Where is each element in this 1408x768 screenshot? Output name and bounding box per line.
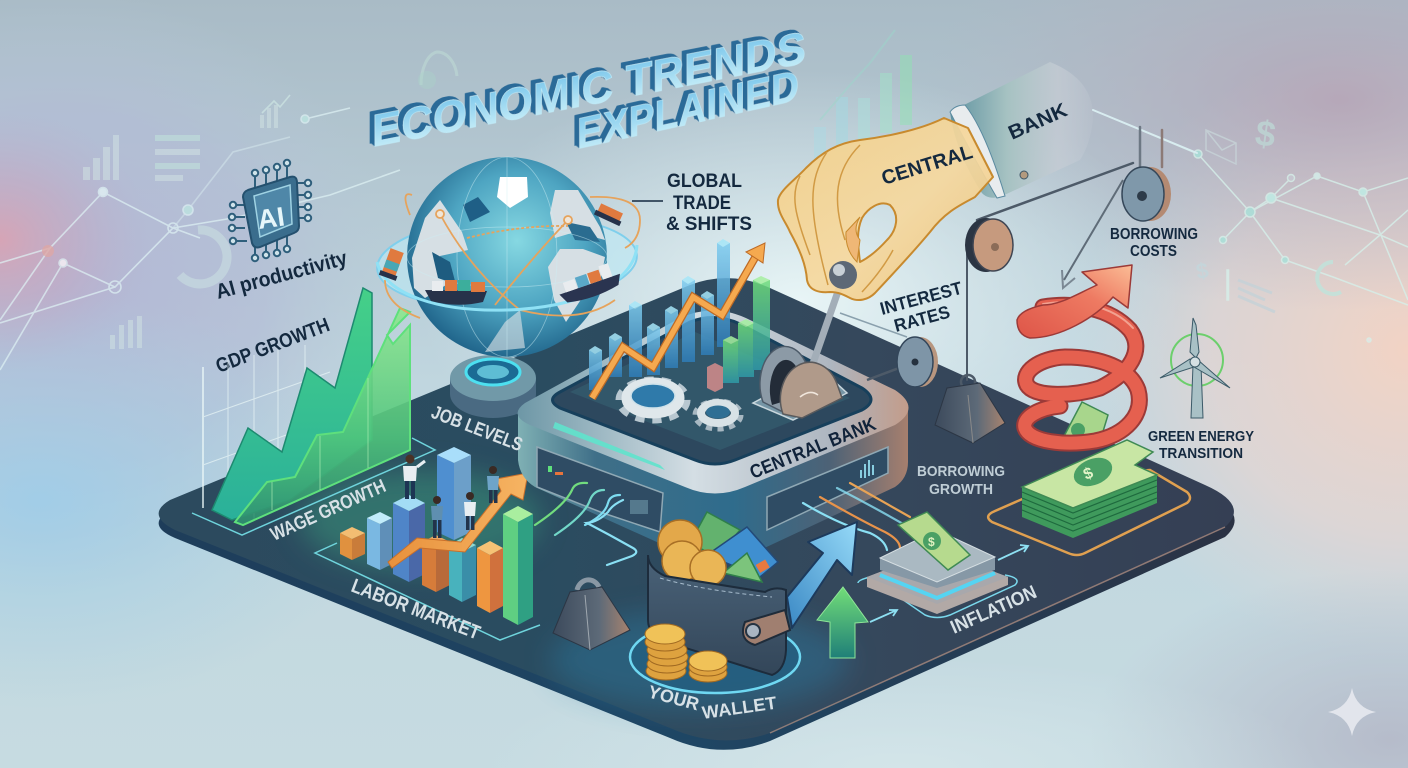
back area series (212, 288, 372, 520)
blue rising arrow (787, 522, 857, 628)
globe sphere (407, 157, 607, 357)
coin stack (645, 624, 688, 680)
platform (159, 278, 1235, 750)
labor market frame (315, 543, 540, 640)
continents (412, 177, 605, 352)
spiral arrow shaft and head (1017, 265, 1132, 338)
cargo ship left (379, 247, 406, 281)
chart grid (203, 345, 330, 520)
lever base plate (753, 368, 847, 420)
orbit ring front (377, 245, 637, 310)
wallet contents (658, 512, 778, 586)
faint network and chart icons, right (1093, 110, 1408, 342)
dollar icon, faint: $ (1253, 112, 1278, 155)
inflation base ring (858, 575, 1017, 618)
label: your wallet: WALLET (701, 693, 778, 723)
central bank console (518, 239, 908, 564)
label: your wallet (646, 682, 778, 723)
console cables (535, 483, 910, 565)
wallet glow ring (630, 621, 800, 693)
label text: TRADE (673, 193, 731, 214)
wallet strap (743, 610, 790, 645)
faint bar chart behind hand (814, 30, 912, 160)
leader line (632, 200, 663, 202)
label: your wallet: YOUR (646, 682, 701, 714)
console top rim (518, 310, 908, 494)
money stack frame (988, 470, 1190, 555)
label: green energy transition (1148, 429, 1254, 462)
console trend arrow (592, 243, 765, 398)
globe on pedestal (375, 157, 640, 418)
worker figures (403, 454, 499, 538)
console label: CENTRAL BANK (747, 414, 879, 484)
banknote (898, 512, 970, 570)
left console panel (537, 447, 663, 532)
large gear (620, 381, 686, 419)
label: GDP growth: GDP GROWTH (213, 314, 333, 378)
label: borrowing costs (1110, 226, 1198, 260)
copper pulley (965, 218, 1013, 272)
console bar chart (589, 239, 770, 392)
sleeve button (1020, 171, 1028, 179)
label: green energy transition: GREEN ENERGY (1148, 429, 1254, 445)
rope with arrow to spiral (1062, 180, 1123, 288)
wallet body (648, 555, 786, 675)
lever rod (810, 277, 843, 372)
sleeve label: BANK (1005, 99, 1071, 145)
label: green energy transition: TRANSITION (1159, 446, 1243, 462)
small pulley (897, 337, 938, 387)
money stack (1022, 440, 1157, 538)
rope from small pulley to console (867, 362, 915, 380)
wind turbine icon (1160, 318, 1230, 418)
hand sleeve (950, 62, 1093, 198)
glowing status strip (553, 422, 665, 470)
upper pulley (1122, 167, 1171, 221)
money stack: $ (1081, 465, 1096, 484)
lever ball (829, 261, 857, 289)
lever housing (760, 346, 811, 411)
turbine tower and blades (1160, 318, 1230, 418)
labor market trend arrow (388, 473, 528, 568)
recessed screen (552, 317, 871, 464)
faint network and chart icons, left (0, 52, 457, 370)
label text: & SHIFTS (666, 214, 752, 235)
label text: GLOBAL (667, 171, 742, 192)
label: inflation: INFLATION (947, 582, 1040, 639)
sparkle watermark (1328, 688, 1376, 736)
your wallet (630, 512, 800, 693)
green up arrow (817, 587, 868, 658)
AI chip icon (229, 160, 311, 261)
label: borrowing costs: COSTS (1130, 243, 1177, 260)
label: labor market: LABOR MARKET (348, 575, 483, 644)
console body (518, 410, 908, 564)
rope from lever to small pulley (840, 313, 907, 337)
front area series (235, 308, 410, 525)
title line one: ECONOMIC TRENDS (372, 22, 806, 157)
cargo ship right (555, 261, 624, 307)
latitude and longitude lines (407, 157, 607, 357)
overhead rail and pulley ropes (967, 110, 1197, 380)
banknote: $ (928, 535, 935, 549)
orbit ring back (375, 209, 639, 315)
title line two: EXPLAINED (577, 61, 799, 159)
small gear (696, 402, 740, 428)
turbine ring (1171, 334, 1223, 386)
inflation lower layer (867, 550, 1008, 614)
small cyan pointer arrows (870, 545, 1028, 622)
label: interest rates: INTEREST (878, 278, 964, 319)
label: borrowing growth (917, 463, 1005, 498)
label: borrowing costs: BORROWING (1110, 226, 1198, 243)
label: interest rates (878, 278, 964, 336)
inflation upper layer (880, 530, 995, 588)
hanging weight (935, 375, 1005, 443)
label: interest rates: RATES (892, 302, 952, 336)
rising spiral arrow (1017, 265, 1139, 443)
label: job levels: JOB LEVELS (428, 402, 525, 456)
AI chip lettering: AI (256, 201, 287, 235)
hand label: CENTRAL (879, 141, 975, 190)
inflation device (858, 512, 1017, 618)
label: global trade and shifts (632, 171, 752, 235)
cargo ship rear (594, 203, 625, 226)
small dollar icon, faint: $ (1194, 257, 1210, 284)
right console panel (767, 447, 888, 530)
inflation glow strip (880, 573, 995, 598)
title (372, 22, 806, 159)
lever front dome (780, 362, 842, 418)
cargo ship front (425, 280, 487, 305)
single coin (689, 651, 727, 682)
globe pedestal (450, 355, 536, 418)
label text (666, 171, 752, 235)
central bank hand (778, 118, 993, 300)
labor market bar chart (340, 447, 533, 625)
loose banknote in spiral (1062, 402, 1108, 448)
chart base frame (192, 438, 435, 535)
GDP growth chart (192, 288, 435, 535)
label: wage growth: WAGE GROWTH (267, 476, 389, 546)
label: borrowing growth: GROWTH (929, 481, 993, 498)
label: AI productivity: AI productivity (213, 247, 350, 304)
sleeve cuff (950, 105, 1005, 198)
label: borrowing growth: BORROWING (917, 463, 1005, 480)
floor weight (553, 580, 630, 650)
trade routes (385, 194, 640, 318)
